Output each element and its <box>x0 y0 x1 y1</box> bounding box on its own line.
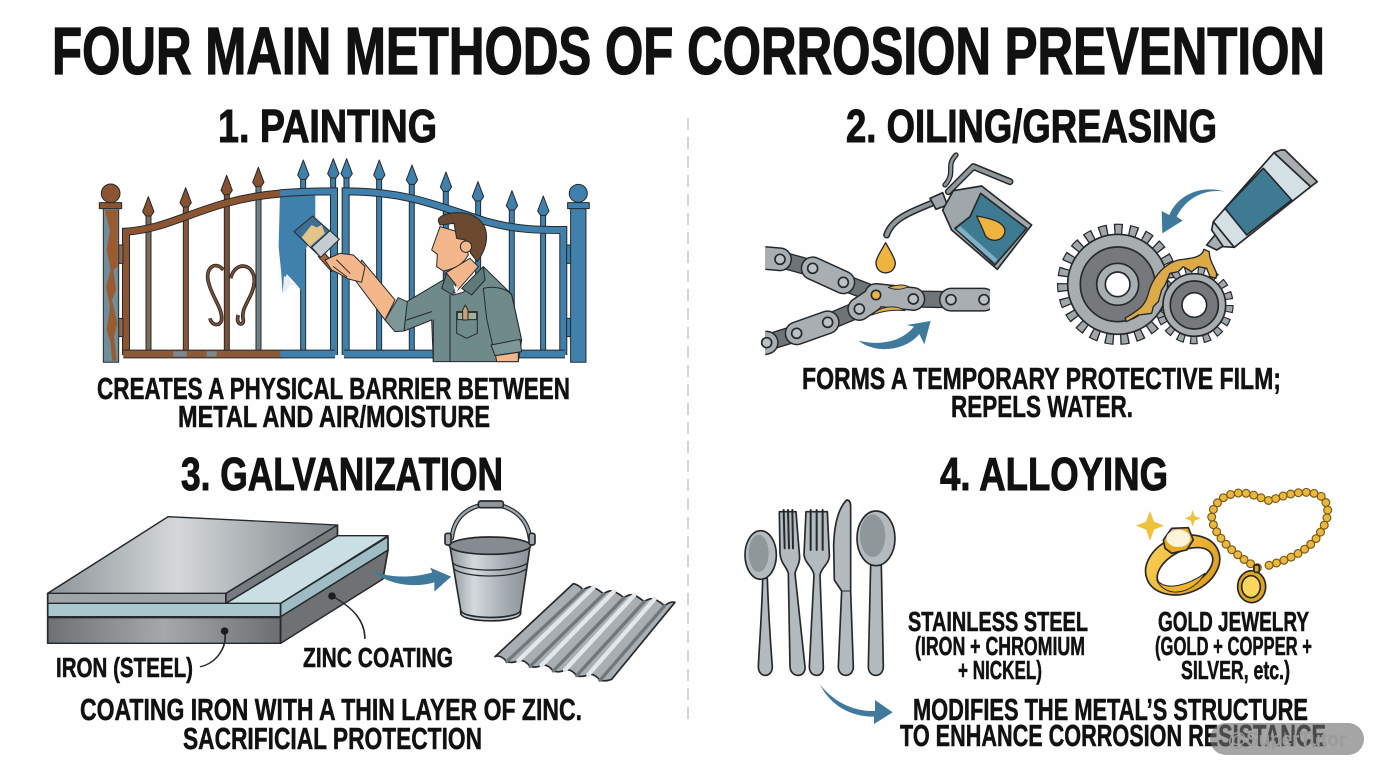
panel: painting <box>97 100 589 434</box>
oil can <box>876 155 1032 273</box>
panel: oiling/greasing <box>740 100 1317 424</box>
description: galvanization: COATING IRON WITH A THIN LAYER OF ZINC. <box>80 692 582 727</box>
heading: oiling/greasing: 2. OILING/GREASING <box>846 100 1217 152</box>
description: oiling/greasing: REPELS WATER. <box>951 389 1133 424</box>
description: galvanization <box>80 692 582 756</box>
description: galvanization: SACRIFICIAL PROTECTION <box>183 721 482 756</box>
watermark: @SuperTutor <box>1228 729 1346 751</box>
label: stainless steel: + NICKEL) <box>958 655 1042 685</box>
necklace <box>1212 492 1328 568</box>
arrow <box>858 321 931 349</box>
heading: painting: 1. PAINTING <box>218 100 437 152</box>
description: alloying <box>900 692 1326 753</box>
sparkles <box>1136 510 1201 541</box>
label: zinc coating: ZINC COATING <box>303 642 453 673</box>
bucket <box>445 501 535 621</box>
chain <box>740 257 984 350</box>
label: stainless steel: STAINLESS STEEL <box>908 606 1088 637</box>
divider <box>687 118 689 725</box>
painter <box>325 213 522 362</box>
scrollwork <box>208 266 223 325</box>
label: gold jewelry: SILVER, etc.) <box>1181 655 1290 685</box>
description: painting: CREATES A PHYSICAL BARRIER BETWEEN <box>97 371 570 406</box>
panel: alloying <box>745 448 1328 753</box>
illustration: gate being painted <box>99 159 589 362</box>
description: painting: METAL AND AIR/MOISTURE <box>178 399 490 434</box>
label: stainless steel <box>908 606 1088 685</box>
paint patch <box>279 191 315 293</box>
arrow <box>1162 189 1225 233</box>
brush <box>294 216 339 272</box>
description: painting <box>97 371 570 434</box>
illustration: gold ring and necklace <box>1136 492 1328 606</box>
left gate frame: rusted <box>123 191 565 355</box>
corrugated sheet <box>495 584 675 681</box>
tube <box>1207 235 1225 250</box>
watermark <box>1210 723 1364 755</box>
illustration: gears and grease tube <box>1063 150 1317 340</box>
label: gold jewelry: GOLD JEWELRY <box>1158 606 1309 637</box>
label: stainless steel: (IRON + CHROMIUM <box>915 631 1085 661</box>
label: gold jewelry <box>1155 606 1312 685</box>
illustration: zinc-coated steel block <box>48 517 451 667</box>
ring <box>1137 524 1229 606</box>
panel: galvanization <box>48 448 675 756</box>
heading: galvanization: 3. GALVANIZATION <box>181 448 503 500</box>
illustration: oil can and chain <box>740 155 1032 350</box>
arrow <box>371 568 451 592</box>
leader lines <box>201 596 365 667</box>
layered block <box>48 517 388 643</box>
illustration: galvanized bucket and corrugated sheet <box>445 501 675 681</box>
right gate frame <box>346 191 563 355</box>
grease <box>1125 249 1217 322</box>
label: iron (steel): IRON (STEEL) <box>56 652 193 683</box>
arrow <box>820 684 893 724</box>
illustration: cutlery <box>745 500 895 724</box>
right post <box>567 245 572 263</box>
heading: alloying: 4. ALLOYING <box>940 448 1168 500</box>
left post <box>99 184 589 362</box>
description: oiling/greasing <box>802 361 1281 424</box>
